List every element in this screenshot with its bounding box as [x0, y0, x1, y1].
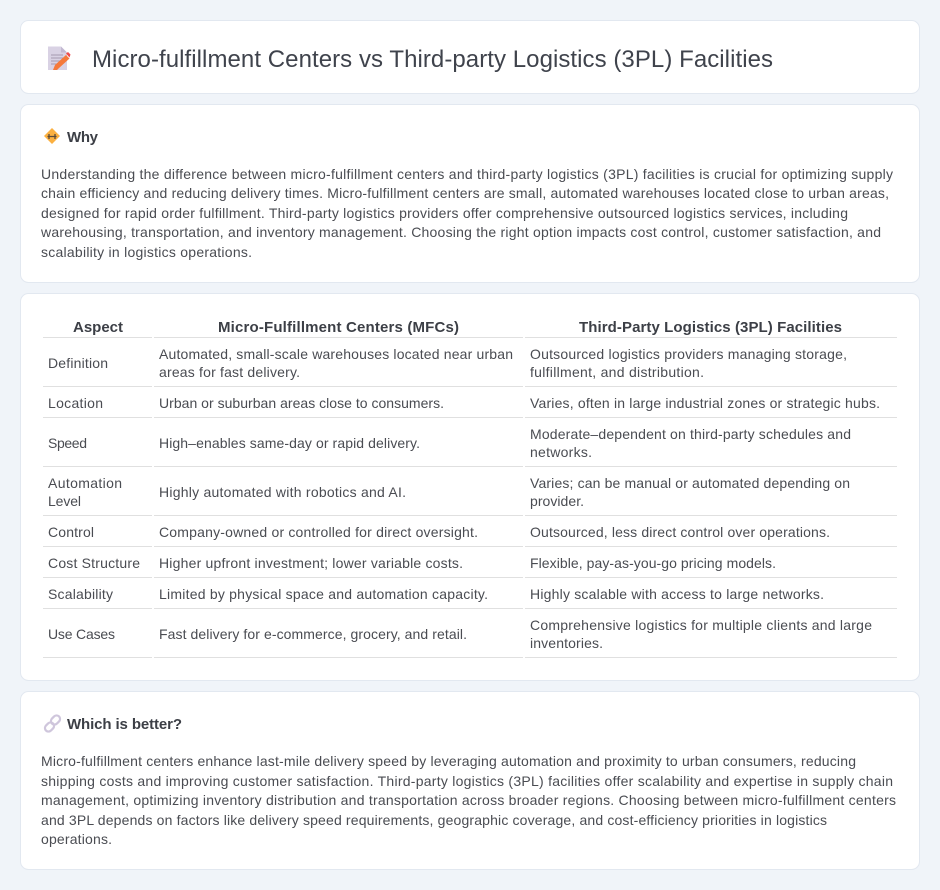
- title: Micro-fulfillment Centers vs Third-party Logistics (3PL) Facilities: [92, 46, 773, 73]
- row: location: Varies, often in large industrial zones or strategic hubs.: [530, 395, 880, 411]
- row: use cases: Comprehensive logistics for multiple clients and large: [530, 617, 872, 633]
- table header row: Third-Party Logistics (3PL) Facilities: [579, 319, 842, 336]
- row: scalability: Limited by physical space and automation capacity.: [159, 586, 488, 602]
- text block: why paragraph: scalability in logistics operations.: [41, 244, 252, 260]
- panel: why: [20, 104, 920, 282]
- row: cost structure: [48, 555, 776, 571]
- row: use cases: Fast delivery for e-commerce, grocery, and retail.: [159, 626, 467, 642]
- row: cost structure: Flexible, pay-as-you-go pricing models.: [530, 555, 776, 571]
- row: automation level: Varies; can be manual or automated depending on: [530, 475, 850, 491]
- panel: which is better: [20, 692, 920, 870]
- row: definition: areas for fast delivery.: [159, 364, 300, 380]
- row: definition: Automated, small-scale warehouses located near urban: [159, 346, 513, 362]
- row: control: Control: [48, 524, 94, 540]
- row: control: Company-owned or controlled for direct oversight.: [159, 524, 478, 540]
- table header row: [73, 319, 842, 336]
- row: location: [48, 395, 880, 411]
- table header row: Micro-Fulfillment Centers (MFCs): [218, 319, 459, 336]
- heading: which is better: Which is better?: [67, 716, 182, 733]
- row: automation level: Automation: [48, 475, 122, 491]
- text block: which is better paragraph: shipping costs and improving customer satisfaction. Third-party logistics (3PL) facilities offer scalability and expertise in supply chain: [41, 773, 893, 789]
- row: cost structure: Higher upfront investment; lower variable costs.: [159, 555, 463, 571]
- text block: why paragraph: [40, 166, 893, 260]
- row: speed: [48, 426, 851, 460]
- row: automation level: provider.: [530, 493, 584, 509]
- row: use cases: inventories.: [530, 635, 603, 651]
- row: scalability: [48, 586, 824, 602]
- text block: why paragraph: designed for rapid order fulfillment. Third-party logistics providers offer comprehensive outsourced logistics services, including: [41, 205, 848, 221]
- heading: why: Why: [67, 129, 99, 146]
- row: speed: networks.: [530, 444, 592, 460]
- row: definition: fulfillment, and distribution.: [530, 364, 704, 380]
- row: automation level: Level: [48, 493, 81, 509]
- text block: which is better paragraph: and 3PL depends on factors like delivery speed requirements, geographic coverage, and cost-efficiency priorities in logistics: [41, 812, 827, 828]
- row: location: Urban or suburban areas close to consumers.: [159, 395, 444, 411]
- text block: which is better paragraph: operations.: [41, 831, 112, 847]
- row: control: [48, 524, 830, 540]
- text block: which is better paragraph: Micro-fulfillment centers enhance last-mile delivery speed by leveraging automation and proximity to urban consumers, reducing: [41, 753, 856, 769]
- row: definition: Outsourced logistics providers managing storage,: [530, 346, 847, 362]
- row: speed: Speed: [48, 435, 87, 451]
- text block: which is better paragraph: management, optimizing inventory distribution and transportation across broader regions. Choosing between micro-fulfillment centers: [41, 792, 896, 808]
- row: control: Outsourced, less direct control over operations.: [530, 524, 830, 540]
- text block: which is better paragraph: [41, 753, 896, 847]
- row: location: Location: [48, 395, 103, 411]
- text block: why paragraph: warehousing, transportation, and inventory management. Choosing the right option impacts cost control, customer satisfaction, and: [40, 224, 881, 240]
- panel: comparison table: [20, 294, 920, 680]
- panel: title header: [20, 20, 920, 94]
- row: cost structure: Cost Structure: [48, 555, 140, 571]
- icon: chain link: [43, 714, 62, 733]
- row: scalability: Highly scalable with access to large networks.: [530, 586, 824, 602]
- table header row: Aspect: [73, 319, 123, 336]
- text block: why paragraph: chain efficiency and reducing delivery times. Micro-fulfillment centers are small, automated warehouses located close to urban areas,: [41, 185, 889, 201]
- row: definition: Definition: [48, 355, 108, 371]
- row: automation level: [48, 475, 850, 509]
- row: scalability: Scalability: [48, 586, 113, 602]
- row: automation level: Highly automated with robotics and AI.: [159, 484, 406, 500]
- row: definition: [48, 346, 847, 380]
- row: use cases: [48, 617, 872, 651]
- row: speed: High–enables same-day or rapid delivery.: [159, 435, 420, 451]
- icon: memo with pencil: [48, 46, 70, 70]
- row: use cases: Use Cases: [48, 626, 115, 642]
- icon: construction diamond: [44, 128, 60, 144]
- row: speed: Moderate–dependent on third-party schedules and: [530, 426, 851, 442]
- text block: why paragraph: Understanding the difference between micro-fulfillment centers and third-party logistics (3PL) facilities is crucial for optimizing supply: [41, 166, 893, 182]
